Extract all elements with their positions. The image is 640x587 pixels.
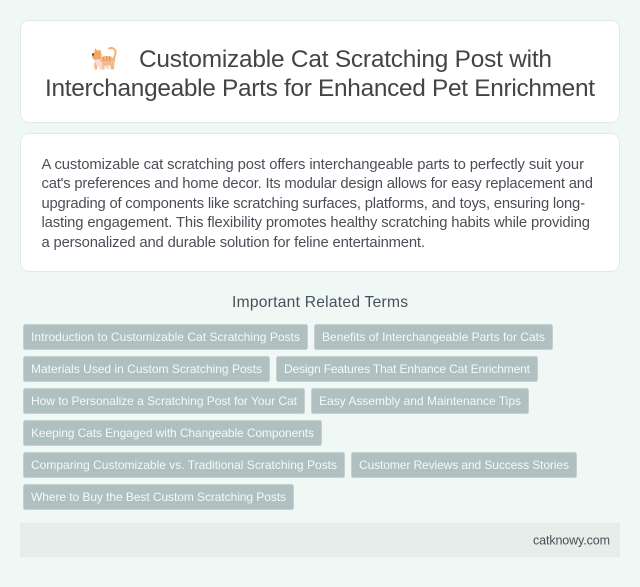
related terms chips — [24, 324, 576, 510]
description text: A customizable cat scratching post offers interchangeable parts to perfectly suit your — [42, 157, 584, 173]
description text: lasting engagement. This flexibility promotes healthy scratching habits while providing — [42, 215, 590, 231]
footer text: catknowy.com — [533, 534, 610, 548]
chip: How to Personalize a Scratching Post for Your Cat — [31, 394, 298, 408]
title line 1: Customizable Cat Scratching Post with — [139, 46, 552, 73]
chip — [314, 324, 552, 350]
chip: Design Features That Enhance Cat Enrichment — [284, 362, 531, 376]
description text: a personalized and durable solution for feline entertainment. — [42, 235, 425, 251]
chip: Introduction to Customizable Cat Scratching Posts — [31, 330, 300, 344]
chip: Easy Assembly and Maintenance Tips — [319, 394, 521, 408]
footer bar — [20, 523, 620, 557]
description text — [42, 157, 593, 251]
chip — [24, 356, 270, 382]
chip — [312, 388, 528, 414]
chip — [24, 420, 322, 446]
chip — [276, 356, 538, 382]
chip: Keeping Cats Engaged with Changeable Components — [31, 426, 314, 440]
chip: Where to Buy the Best Custom Scratching Posts — [31, 490, 286, 504]
chip — [24, 484, 294, 510]
panel: description card — [20, 134, 620, 272]
chip: Comparing Customizable vs. Traditional Scratching Posts — [31, 458, 337, 472]
icon: cat — [92, 48, 116, 70]
chip: Materials Used in Custom Scratching Posts — [31, 362, 262, 376]
chip — [24, 452, 344, 478]
chip: Benefits of Interchangeable Parts for Cats — [322, 330, 545, 344]
panel: title card — [20, 20, 620, 122]
heading: related terms: Important Related Terms — [232, 294, 408, 311]
chip — [24, 388, 304, 414]
chip: Customer Reviews and Success Stories — [359, 458, 569, 472]
chip — [352, 452, 576, 478]
chip — [24, 324, 308, 350]
description text: upgrading of components like scratching surfaces, platforms, and toys, ensuring long- — [42, 196, 585, 212]
description text: cat's preferences and home decor. Its modular design allows for easy replacement and — [42, 176, 593, 192]
title line 2: Interchangeable Parts for Enhanced Pet Enrichment — [45, 75, 595, 102]
